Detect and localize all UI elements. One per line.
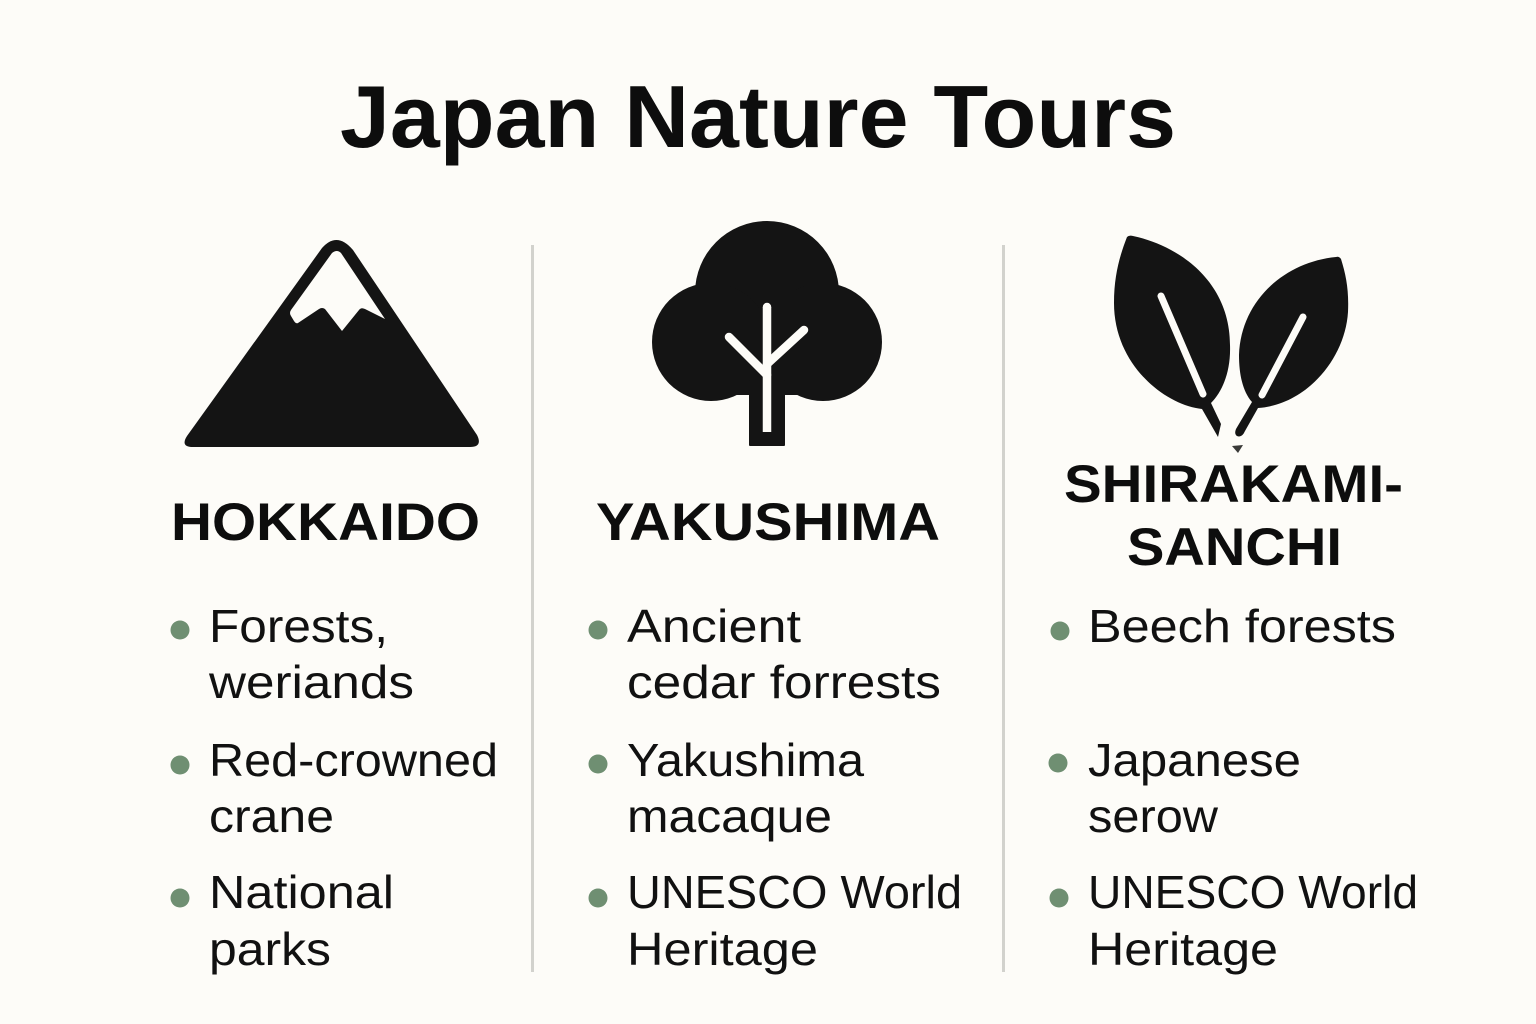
icon: two leaves xyxy=(1114,236,1348,453)
bullet: ancient cedar forests: Ancient xyxy=(627,600,801,652)
bullet: red-crowned crane: Red-crowned xyxy=(209,734,498,786)
heading: Shirakami-Sanchi: SANCHI xyxy=(1127,518,1342,577)
heading: Yakushima: YAKUSHIMA xyxy=(596,493,940,552)
bullet: red-crowned crane: crane xyxy=(209,790,334,842)
bullet: red-crowned crane xyxy=(170,734,498,842)
bullet: Japanese serow: serow xyxy=(1088,790,1219,842)
bullet: Yakushima macaque xyxy=(588,734,864,842)
bullet: Japanese serow: Japanese xyxy=(1088,734,1301,786)
heading: Shirakami-Sanchi: SHIRAKAMI- xyxy=(1064,455,1403,514)
bullet: forests, wetlands: weriands xyxy=(208,656,414,708)
bullet: ancient cedar forests: cedar forrests xyxy=(627,656,941,708)
panel: Hokkaido xyxy=(170,240,498,975)
bullet: UNESCO World Heritage: UNESCO World xyxy=(627,866,962,918)
heading: Hokkaido: HOKKAIDO xyxy=(171,493,480,552)
bullet: UNESCO World Heritage xyxy=(588,866,962,975)
icon: snow-capped mountain xyxy=(185,240,479,447)
bullet: UNESCO World Heritage: Heritage xyxy=(1088,923,1278,975)
bullet: forests, wetlands xyxy=(170,600,414,708)
bullet: national parks: National xyxy=(209,866,394,918)
bullet: UNESCO World Heritage xyxy=(1050,866,1418,975)
bullet: UNESCO World Heritage: UNESCO World xyxy=(1088,866,1418,918)
title: Japan Nature Tours xyxy=(340,67,1176,166)
bullet: national parks xyxy=(170,866,394,975)
bullet: forests, wetlands: Forests, xyxy=(209,600,388,652)
bullet: Yakushima macaque: Yakushima xyxy=(627,734,864,786)
bullet: ancient cedar forests xyxy=(588,600,941,708)
heading: Shirakami-Sanchi xyxy=(1064,455,1403,577)
bullet: UNESCO World Heritage: Heritage xyxy=(627,923,818,975)
bullet: beech forests: Beech forests xyxy=(1088,600,1396,652)
panel: Shirakami-Sanchi xyxy=(1048,236,1418,975)
icon: tree xyxy=(652,221,882,446)
bullet: Japanese serow xyxy=(1048,734,1301,842)
bullet: national parks: parks xyxy=(209,923,331,975)
panel: Yakushima xyxy=(588,221,962,975)
bullet: Yakushima macaque: macaque xyxy=(627,790,832,842)
